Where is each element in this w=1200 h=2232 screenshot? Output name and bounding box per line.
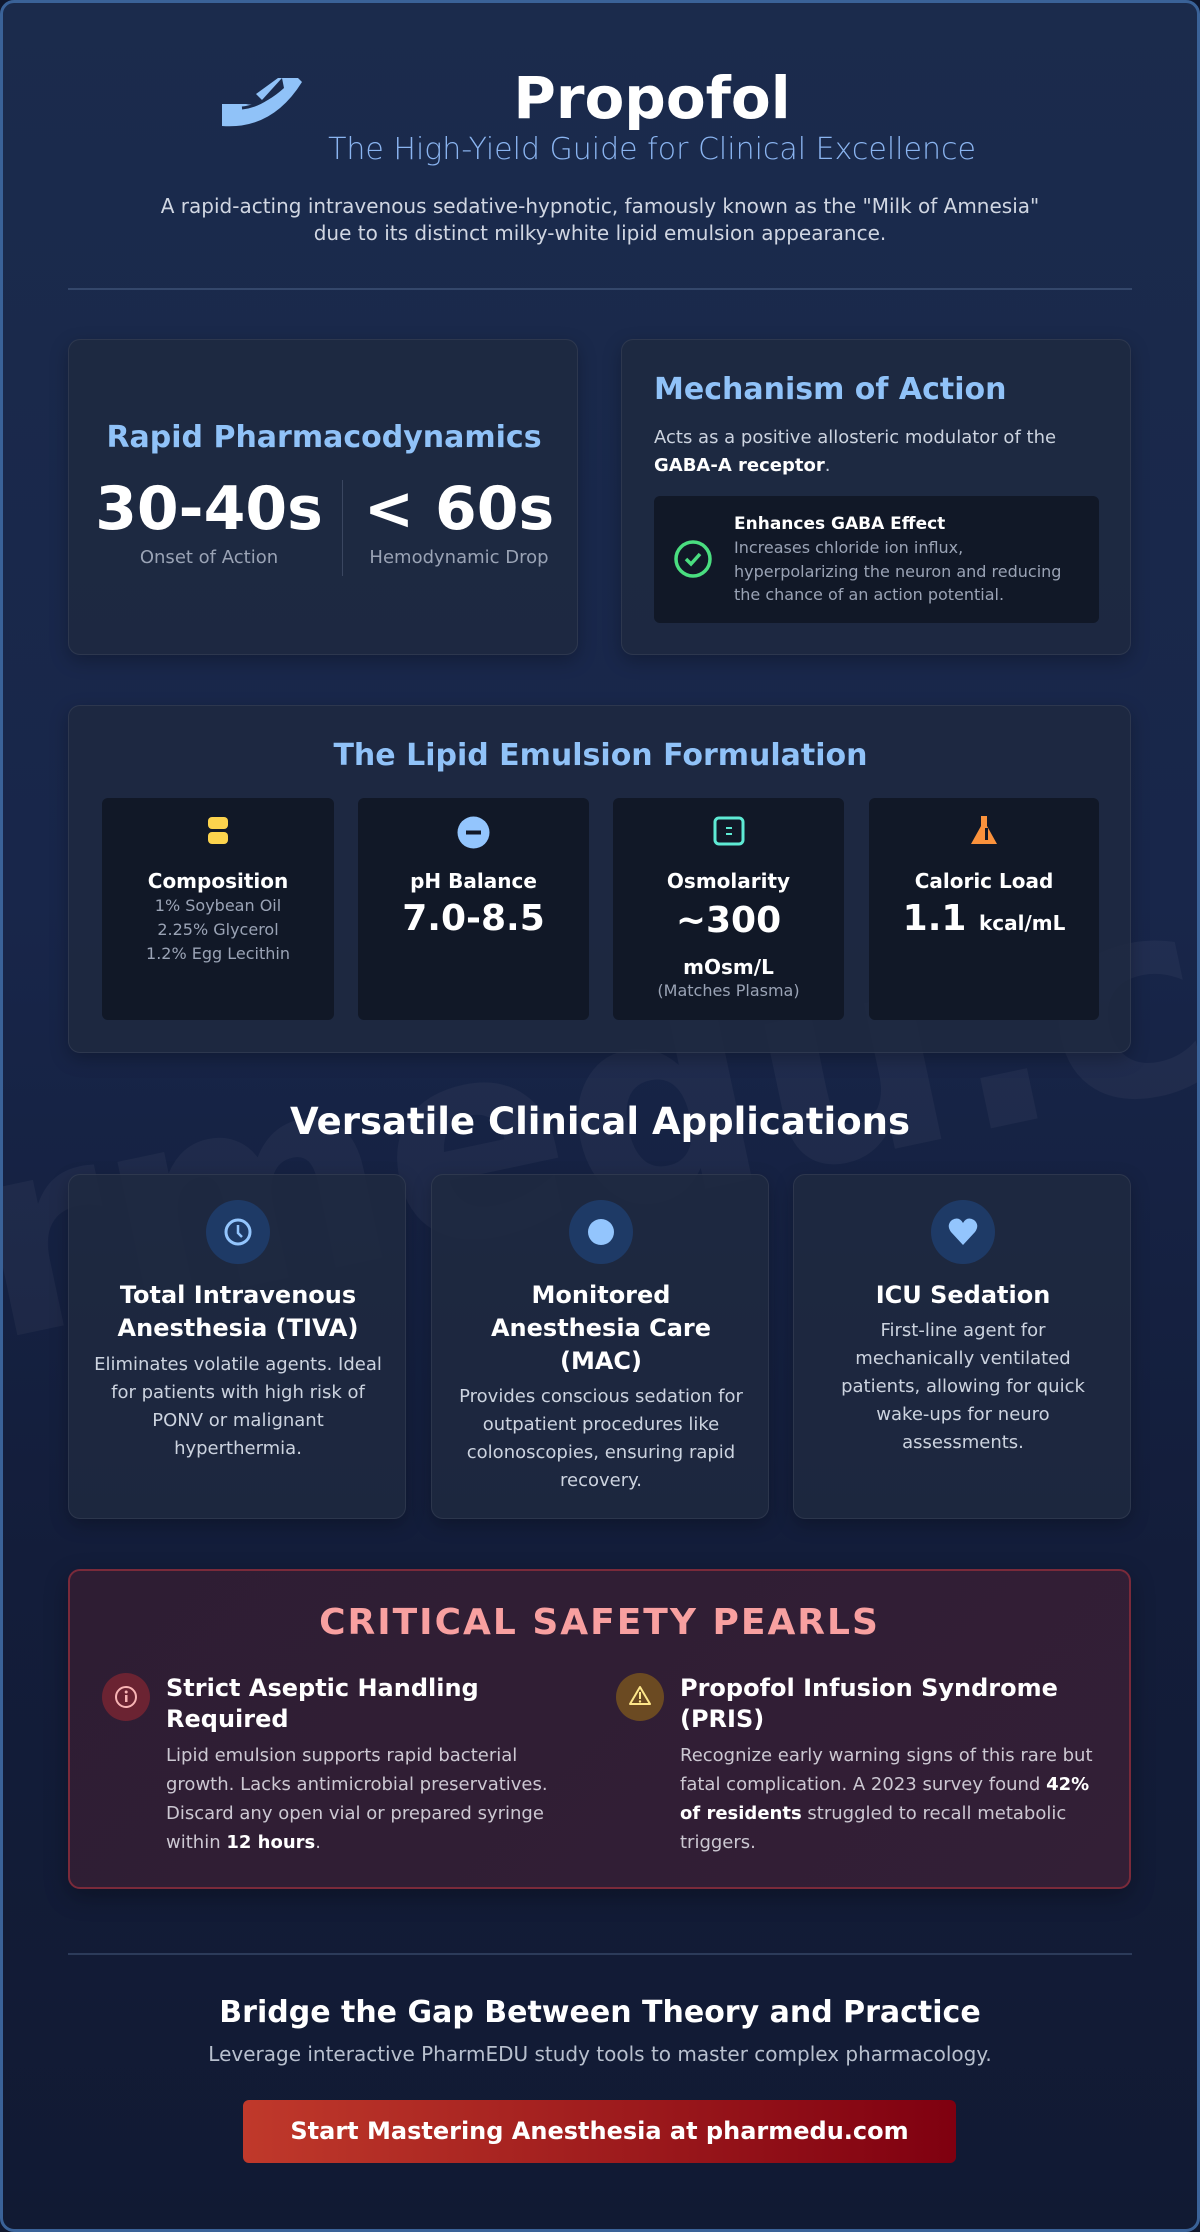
card: composition [102,798,334,1020]
panel: mechanism of action [621,339,1131,655]
card: pH: pH Balance [410,869,537,893]
stat: onset: Onset of Action [140,547,278,568]
icon: check [674,540,712,578]
card: pH [358,798,589,1020]
heading: Mechanism of Action [654,372,1006,407]
icon: minus circle [458,816,490,848]
stat: hemodynamic: Hemodynamic Drop [369,547,549,568]
card: composition: 2.25% Glycerol [157,920,279,939]
card: composition: 1% Soybean Oil [155,896,281,915]
card: pH: 7.0-8.5 [402,898,545,939]
callout: GABA effect: Enhances GABA Effect [734,514,945,534]
card: caloric load: Caloric Load [915,869,1053,893]
panel: rapid pharmacodynamics [68,339,578,655]
button [243,2100,956,2163]
stat: onset: 30-40s [95,474,323,544]
intro text: due to its distinct milky-white lipid emulsion appearance. [314,221,886,245]
card: composition: 1.2% Egg Lecithin [146,944,290,963]
CTA heading: Bridge the Gap Between Theory and Practice [219,1995,981,2030]
text: Acts as a positive allosteric modulator of the GABA-A receptor. [654,427,1056,476]
card: composition: Composition [148,869,288,893]
card: osmolarity: (Matches Plasma) [657,981,800,1000]
card: caloric load [869,798,1099,1020]
heading: applications: Versatile Clinical Applications [290,1100,910,1143]
card: osmolarity: Osmolarity [667,869,790,893]
icon: heart [931,1200,995,1264]
item: PRIS: Propofol Infusion Syndrome (PRIS) [680,1674,1058,1733]
icon: info [102,1673,150,1721]
item: PRIS: Recognize early warning signs of this rare but fatal complication. A 2023 survey found 42% of residents struggled to recall metabolic triggers. [680,1745,1093,1853]
icon: logo [222,78,302,126]
callout: GABA effect: Increases chloride ion influx, hyperpolarizing the neuron and reducing the chance of an action potential. [734,538,1061,604]
card: caloric load: 1.1 kcal/mL [903,898,1065,939]
title: Propofol [513,64,791,132]
icon: flask [971,816,997,844]
card: ICU [793,1174,1131,1519]
panel: safety pearls [68,1569,1131,1889]
item: aseptic: Strict Aseptic Handling Required [166,1674,479,1733]
card: ICU: First-line agent for mechanically ventilated patients, allowing for quick wake-ups for neuro assessments. [841,1320,1085,1453]
icon: warning [616,1673,664,1721]
icon: dot [569,1200,633,1264]
intro text: A rapid-acting intravenous sedative-hypnotic, famously known as the "Milk of Amnesia" [161,194,1039,218]
card: MAC [431,1174,769,1519]
heading: CRITICAL SAFETY PEARLS [319,1602,880,1643]
card: MAC: Monitored Anesthesia Care (MAC) [491,1281,711,1375]
card: osmolarity: ~300 [676,900,781,941]
card: TIVA: Total Intravenous Anesthesia (TIVA) [118,1281,358,1342]
card: MAC: Provides conscious sedation for outpatient procedures like colonoscopies, ensuring rapid recovery. [459,1386,743,1491]
card: TIVA: Eliminates volatile agents. Ideal for patients with high risk of PONV or malignant hyperthermia. [94,1354,382,1459]
button: Start Mastering Anesthesia at pharmedu.com [290,2117,909,2145]
item: aseptic [102,1673,548,1853]
heading: The Lipid Emulsion Formulation [333,738,868,773]
item: aseptic: Lipid emulsion supports rapid bacterial growth. Lacks antimicrobial preservatives. Discard any open vial or prepared syringe within 12 hours. [166,1745,548,1853]
card: TIVA [68,1174,406,1519]
card: ICU: ICU Sedation [876,1281,1050,1309]
card: osmolarity [613,798,844,1020]
stat: hemodynamic: < 60s [364,474,554,544]
callout: GABA effect [654,496,1099,623]
item: PRIS [616,1673,1093,1853]
icon: clock [206,1200,270,1264]
icon: box [714,816,744,846]
icon: capsule [208,817,228,844]
heading: Rapid Pharmacodynamics [106,420,542,455]
card: osmolarity: mOsm/L [683,955,774,979]
panel: lipid emulsion formulation [68,705,1131,1053]
CTA subtitle: Leverage interactive PharmEDU study tools to master complex pharmacology. [208,2042,992,2066]
subtitle: The High-Yield Guide for Clinical Excellence [328,132,976,167]
intro text [161,194,1039,245]
